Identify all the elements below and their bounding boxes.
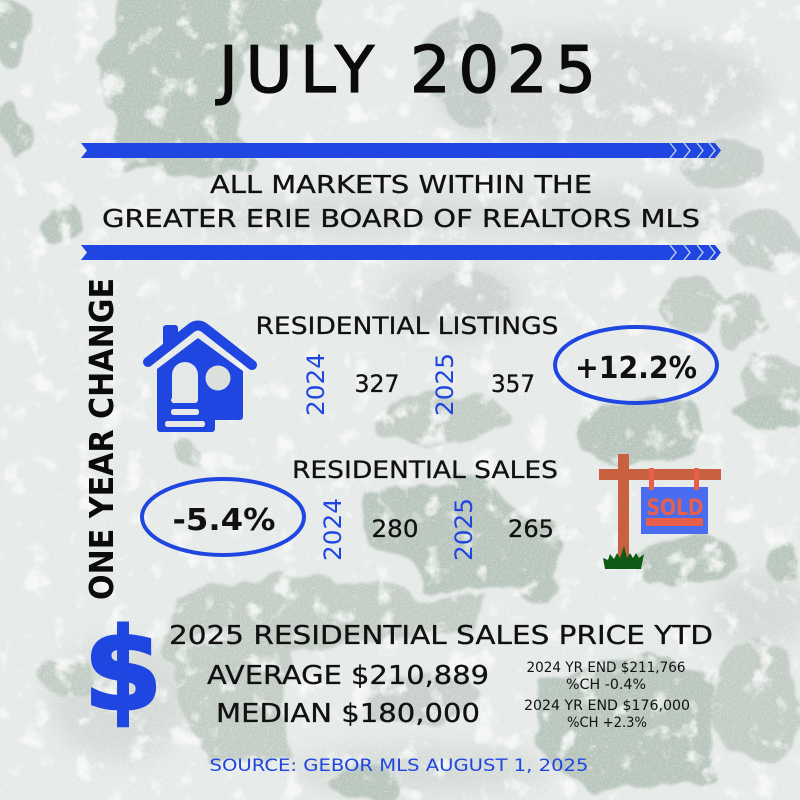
subtitle: ALL MARKETS WITHIN THE bbox=[210, 170, 592, 199]
comparison: median bbox=[524, 698, 690, 731]
source line: SOURCE: GEBOR MLS AUGUST 1, 2025 bbox=[210, 756, 588, 776]
sales 2025 value: 265 bbox=[508, 515, 554, 543]
comparison: median: %CH +2.3% bbox=[567, 715, 647, 731]
icon: sold sign bbox=[599, 454, 721, 569]
average price: AVERAGE $210,889 bbox=[207, 661, 489, 691]
sales 2024 value: 2024 bbox=[319, 498, 347, 561]
icon: house bbox=[148, 325, 252, 432]
callout: sales change bbox=[142, 479, 304, 555]
sales 2025 value: 2025 bbox=[450, 498, 478, 561]
arrow banner: bottom bbox=[81, 245, 721, 260]
subtitle: GREATER ERIE BOARD OF REALTORS MLS bbox=[102, 204, 700, 233]
callout: listings change bbox=[555, 327, 717, 403]
sales 2024 value bbox=[319, 498, 418, 561]
callout: listings change: +12.2% bbox=[575, 351, 697, 386]
arrow banner: top bbox=[81, 143, 721, 158]
icon: dollar sign: $ bbox=[84, 604, 162, 736]
median price: MEDIAN $180,000 bbox=[216, 699, 480, 729]
listings 2024 value bbox=[302, 353, 400, 416]
listings 2024 value: 327 bbox=[354, 370, 400, 398]
heading: residential sales: RESIDENTIAL SALES bbox=[292, 456, 558, 484]
subtitle bbox=[102, 170, 700, 233]
icon: sold sign: SOLD bbox=[646, 496, 704, 521]
vertical heading: one year change: ONE YEAR CHANGE bbox=[82, 278, 121, 600]
callout: sales change: -5.4% bbox=[172, 503, 276, 538]
sales 2024 value: 280 bbox=[372, 515, 418, 543]
comparison: average: %CH -0.4% bbox=[566, 677, 646, 693]
listings 2024 value: 2024 bbox=[302, 353, 330, 416]
listings 2025 value: 2025 bbox=[431, 353, 459, 416]
title: JULY 2025 bbox=[215, 34, 596, 108]
sales 2025 value bbox=[450, 498, 554, 561]
comparison: average: 2024 YR END $211,766 bbox=[526, 660, 686, 676]
listings 2025 value: 357 bbox=[491, 370, 535, 398]
comparison: average bbox=[526, 660, 686, 693]
listings 2025 value bbox=[431, 353, 535, 416]
heading: sales price ytd: 2025 RESIDENTIAL SALES PRICE YTD bbox=[169, 621, 713, 651]
heading: residential listings: RESIDENTIAL LISTINGS bbox=[256, 312, 558, 340]
comparison: median: 2024 YR END $176,000 bbox=[524, 698, 690, 714]
